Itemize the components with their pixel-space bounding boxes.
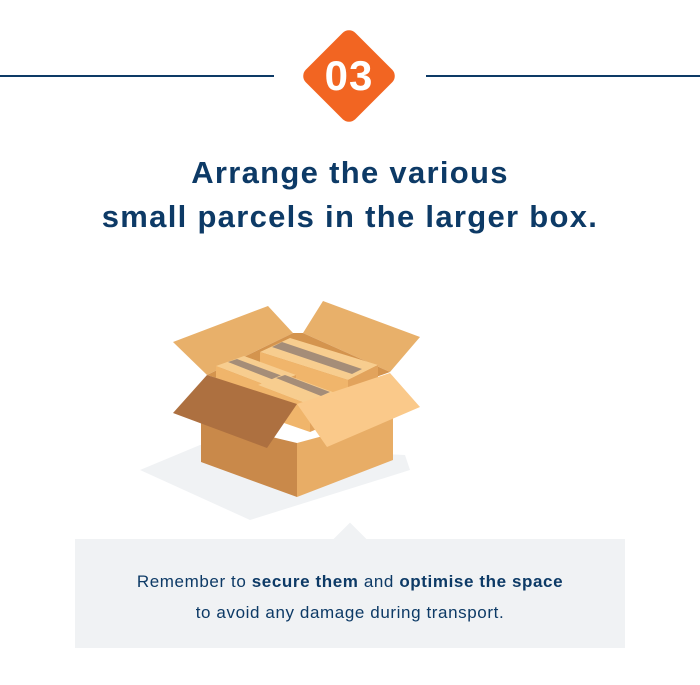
callout text — [137, 572, 563, 622]
callout text: Remember to secure them and optimise the space — [137, 572, 563, 591]
shadow — [140, 445, 410, 520]
front flaps — [173, 375, 297, 448]
title: small parcels in the larger box. — [102, 199, 598, 234]
front faces — [201, 420, 297, 497]
illustration: open box with parcels — [140, 301, 420, 520]
callout — [75, 523, 625, 648]
parcels — [216, 338, 378, 432]
callout text: to avoid any damage during transport. — [196, 603, 504, 622]
front right parcel — [258, 374, 338, 405]
header lines — [0, 75, 700, 77]
title — [102, 155, 598, 234]
front left parcel — [216, 356, 296, 386]
big back parcel — [260, 338, 378, 380]
title: Arrange the various — [191, 155, 509, 190]
inner back — [207, 333, 390, 405]
badge: 03: 03 — [325, 52, 373, 99]
badge: 03 — [303, 30, 395, 122]
back flaps — [173, 306, 293, 375]
